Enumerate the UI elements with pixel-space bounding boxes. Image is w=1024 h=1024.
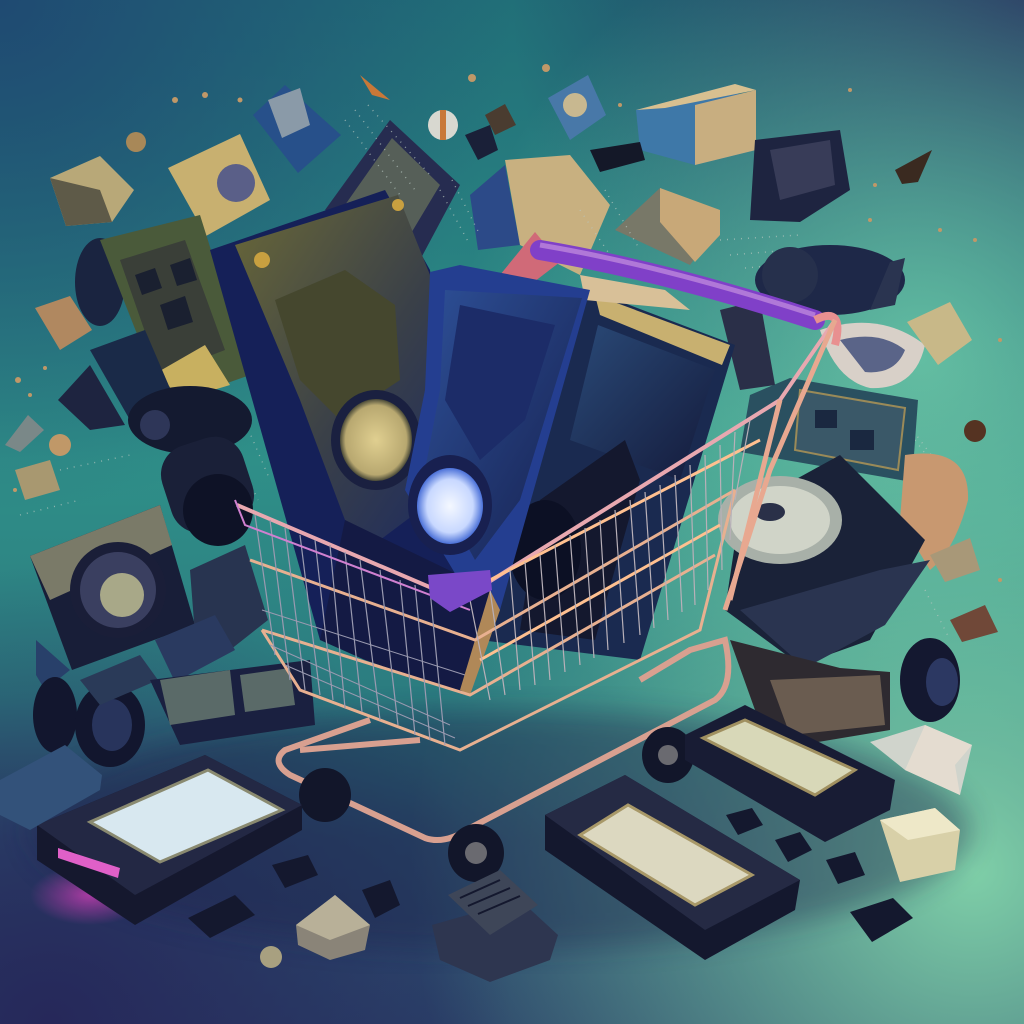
small round part <box>260 946 282 968</box>
hard drive open platter <box>718 453 998 745</box>
cart handle <box>500 232 838 345</box>
right side circuit board and helmet shapes <box>720 245 972 482</box>
small particles <box>13 64 1002 582</box>
drive on floor right <box>685 705 895 842</box>
dust clouds <box>20 105 960 640</box>
boxes on the right floor <box>870 725 972 882</box>
drive on floor left <box>30 755 302 925</box>
cart corner bracket <box>428 570 492 612</box>
small box left <box>0 745 102 830</box>
shopping cart basket <box>235 320 835 750</box>
cart rear contents: third drive <box>480 275 735 660</box>
speaker and dark shapes at left <box>5 215 250 500</box>
large hard drive left <box>210 190 470 650</box>
large hard drive middle <box>320 265 590 695</box>
cart wheels <box>299 727 694 882</box>
cart base frame <box>279 640 728 840</box>
dark parts and graphics card at left <box>30 505 315 767</box>
floor chips <box>188 808 913 942</box>
camera <box>128 386 262 546</box>
scattered cubes and chips at top <box>50 75 932 275</box>
drive on floor center <box>545 775 800 960</box>
floor shadow <box>30 710 970 950</box>
small cube on floor <box>296 895 370 960</box>
stacked device on floor <box>432 870 558 982</box>
